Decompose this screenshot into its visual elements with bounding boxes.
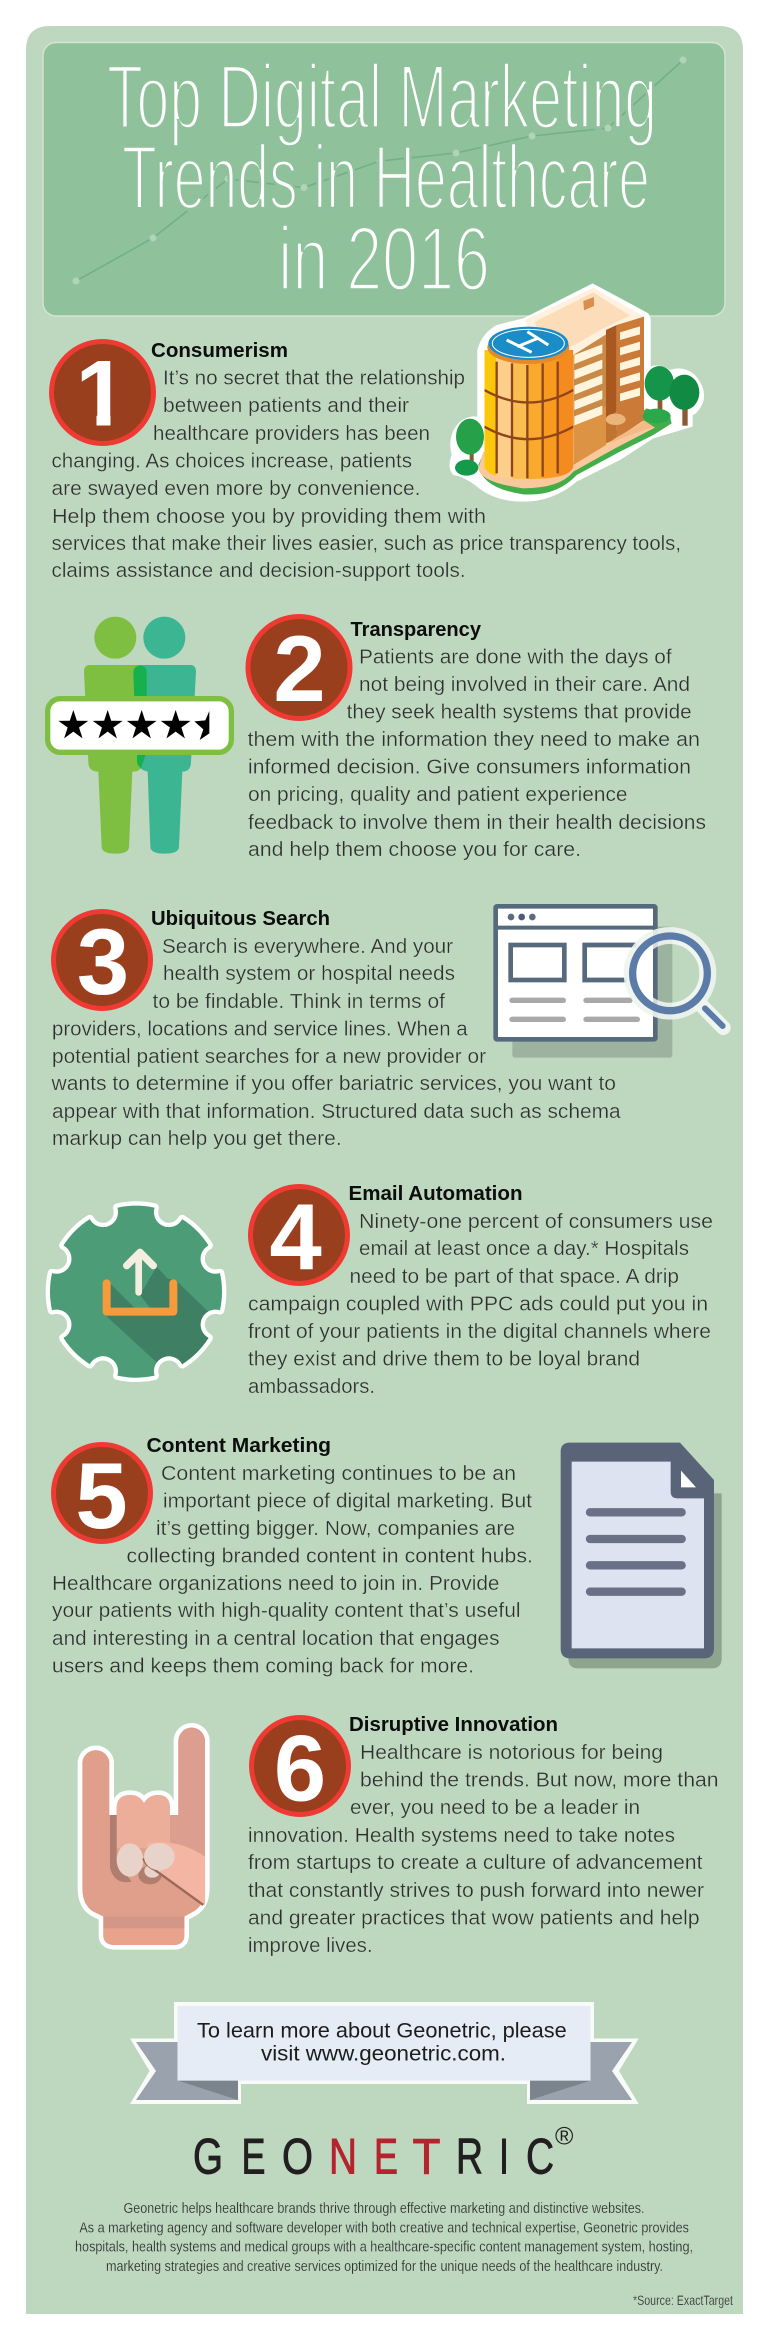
- body text: Ubiquitous Search: health system or hospital needs: [163, 962, 455, 985]
- logo: Geonetric: [193, 2122, 574, 2185]
- body text: Ubiquitous Search: markup can help you get there.: [52, 1127, 342, 1150]
- callout ribbon banner: [130, 2002, 639, 2104]
- number badge 1: [52, 340, 154, 446]
- source note: *Source: ExactTarget: [633, 2292, 733, 2308]
- body text: Content Marketing: Content marketing continues to be an: [161, 1462, 516, 1485]
- body text: Consumerism: changing. As choices increase, patients: [52, 450, 412, 473]
- body text: Transparency: they seek health systems that provide: [347, 701, 692, 724]
- icon: hospital building: [450, 283, 704, 502]
- body text: Email Automation: campaign coupled with PPC ads could put you in: [248, 1292, 708, 1316]
- logo: Geonetric: E: [242, 2129, 266, 2185]
- body text: Transparency: Patients are done with the days of: [359, 646, 672, 668]
- section 2: Transparency: [48, 616, 706, 861]
- body text: Consumerism: Help them choose you by providing them with: [52, 505, 486, 528]
- number badge 5: 5: [75, 1443, 128, 1548]
- body text: Ubiquitous Search: potential patient searches for a new provider or: [52, 1045, 486, 1068]
- body text: Transparency: informed decision. Give consumers information: [248, 756, 691, 779]
- number badge 5: [54, 1443, 150, 1548]
- logo: Geonetric: ®: [555, 2122, 574, 2150]
- body text: Consumerism: are swayed even more by convenience.: [52, 477, 420, 500]
- number badge 1: 1: [75, 340, 128, 446]
- logo: Geonetric: E: [374, 2129, 398, 2185]
- body text: Content Marketing: collecting branded content in content hubs.: [126, 1545, 533, 1568]
- body text: Email Automation: email at least once a day.* Hospitals: [359, 1237, 689, 1260]
- banner text: To learn more about Geonetric, please: [197, 2020, 567, 2043]
- icon: browser window with magnifying glass: [496, 906, 723, 1058]
- body text: Consumerism: claims assistance and decision-support tools.: [52, 559, 465, 582]
- heading: Content Marketing: Content Marketing: [146, 1434, 331, 1457]
- heading: Email Automation: Email Automation: [348, 1182, 522, 1205]
- number badge 3: 3: [77, 909, 129, 1014]
- body text: Content Marketing: and interesting in a central location that engages: [52, 1627, 499, 1650]
- heading: Ubiquitous Search: Ubiquitous Search: [151, 907, 330, 930]
- body text: Transparency: not being involved in their care. And: [359, 673, 690, 696]
- body text: Ubiquitous Search: [50, 935, 621, 1150]
- body text: Disruptive Innovation: that constantly strives to push forward into newer: [248, 1879, 704, 1902]
- icon: two people with star rating: [48, 617, 231, 854]
- banner text: visit www.geonetric.com.: [261, 2043, 506, 2066]
- body text: Email Automation: need to be part of that space. A drip: [350, 1265, 679, 1288]
- icon: document: [561, 1443, 722, 1668]
- icon: gear with upload arrow: [50, 1206, 222, 1378]
- body text: Ubiquitous Search: wants to determine if you offer bariatric services, you want to: [50, 1072, 616, 1095]
- company description: marketing strategies and creative services optimized for the unique needs of the healthcare industry.: [106, 2258, 663, 2275]
- body text: Transparency: on pricing, quality and patient experience: [248, 783, 628, 806]
- body text: Disruptive Innovation: from startups to create a culture of advancement: [248, 1851, 703, 1874]
- body text: Consumerism: [52, 367, 681, 582]
- section 5: Content Marketing: [52, 1434, 722, 1678]
- icon: rock-on hand: [82, 1728, 205, 1945]
- logo: Geonetric: N: [329, 2129, 357, 2185]
- body text: Disruptive Innovation: innovation. Health systems need to take notes: [248, 1824, 675, 1847]
- body text: Content Marketing: it’s getting bigger. Now, companies are: [156, 1517, 515, 1540]
- logo: Geonetric: I: [499, 2129, 509, 2185]
- trend line decoration: [72, 56, 686, 284]
- panel: title header: [43, 42, 725, 316]
- body text: Transparency: and help them choose you for care.: [248, 838, 581, 861]
- company description: Geonetric helps healthcare brands thrive through effective marketing and distinctive websites.: [124, 2200, 644, 2217]
- section 6: Disruptive Innovation: [82, 1713, 719, 1957]
- number badge 2: 2: [273, 616, 326, 721]
- body text: Disruptive Innovation: [248, 1741, 719, 1957]
- body text: Transparency: [248, 646, 706, 861]
- logo: Geonetric: O: [282, 2129, 313, 2185]
- body text: Disruptive Innovation: improve lives.: [248, 1934, 372, 1957]
- body text: Email Automation: front of your patients in the digital channels where: [248, 1320, 711, 1343]
- logo: Geonetric: C: [526, 2129, 554, 2185]
- logo: Geonetric: T: [412, 2129, 440, 2185]
- body text: Content Marketing: [52, 1462, 533, 1678]
- body text: Ubiquitous Search: Search is everywhere. And your: [162, 935, 453, 958]
- heading: Disruptive Innovation: Disruptive Innovation: [349, 1713, 558, 1736]
- number badge 2: [248, 616, 350, 721]
- body text: Disruptive Innovation: ever, you need to be a leader in: [350, 1796, 640, 1819]
- body text: Email Automation: Ninety-one percent of consumers use: [359, 1210, 713, 1233]
- heading: Consumerism: Consumerism: [151, 339, 288, 362]
- section 1: Consumerism: [52, 283, 704, 582]
- logo: Geonetric: R: [456, 2129, 483, 2185]
- number badge 4: 4: [269, 1184, 322, 1289]
- body text: Content Marketing: your patients with high-quality content that’s useful: [52, 1599, 521, 1622]
- body text: Email Automation: [248, 1210, 713, 1398]
- body text: Ubiquitous Search: appear with that information. Structured data such as schema: [52, 1100, 621, 1123]
- body text: Disruptive Innovation: behind the trends. But now, more than: [360, 1769, 719, 1792]
- body text: Consumerism: It’s no secret that the relationship: [163, 367, 465, 390]
- section 3: Ubiquitous Search: [50, 906, 723, 1150]
- number badge 6: 6: [274, 1716, 326, 1820]
- body text: Content Marketing: users and keeps them coming back for more.: [52, 1654, 474, 1678]
- body text: Email Automation: they exist and drive them to be loyal brand: [248, 1348, 640, 1371]
- number badge 6: [252, 1716, 348, 1820]
- logo: Geonetric: G: [193, 2129, 223, 2185]
- section 4: Email Automation: [50, 1182, 713, 1398]
- body text: Transparency: feedback to involve them in their health decisions: [248, 811, 706, 834]
- body text: Consumerism: healthcare providers has been: [153, 422, 430, 445]
- title: in 2016: [278, 209, 490, 310]
- body text: Transparency: them with the information they need to make an: [248, 728, 700, 751]
- body text: Disruptive Innovation: Healthcare is notorious for being: [360, 1741, 663, 1764]
- body text: Ubiquitous Search: providers, locations and service lines. When a: [52, 1018, 468, 1040]
- banner text: [197, 2020, 567, 2066]
- number badge 4: [250, 1184, 348, 1289]
- number badge 3: [54, 909, 150, 1014]
- body text: Content Marketing: important piece of digital marketing. But: [163, 1490, 532, 1512]
- body text: Email Automation: ambassadors.: [248, 1375, 375, 1398]
- body text: Consumerism: between patients and their: [163, 394, 409, 417]
- company description: [75, 2200, 693, 2275]
- title: [107, 47, 657, 310]
- body text: Content Marketing: Healthcare organizations need to join in. Provide: [52, 1572, 499, 1595]
- body text: Consumerism: services that make their lives easier, such as price transparency tools,: [52, 532, 681, 555]
- body text: Ubiquitous Search: to be findable. Think in terms of: [152, 990, 445, 1013]
- body text: Disruptive Innovation: and greater practices that wow patients and help: [248, 1906, 700, 1930]
- heading: Transparency: Transparency: [350, 618, 482, 641]
